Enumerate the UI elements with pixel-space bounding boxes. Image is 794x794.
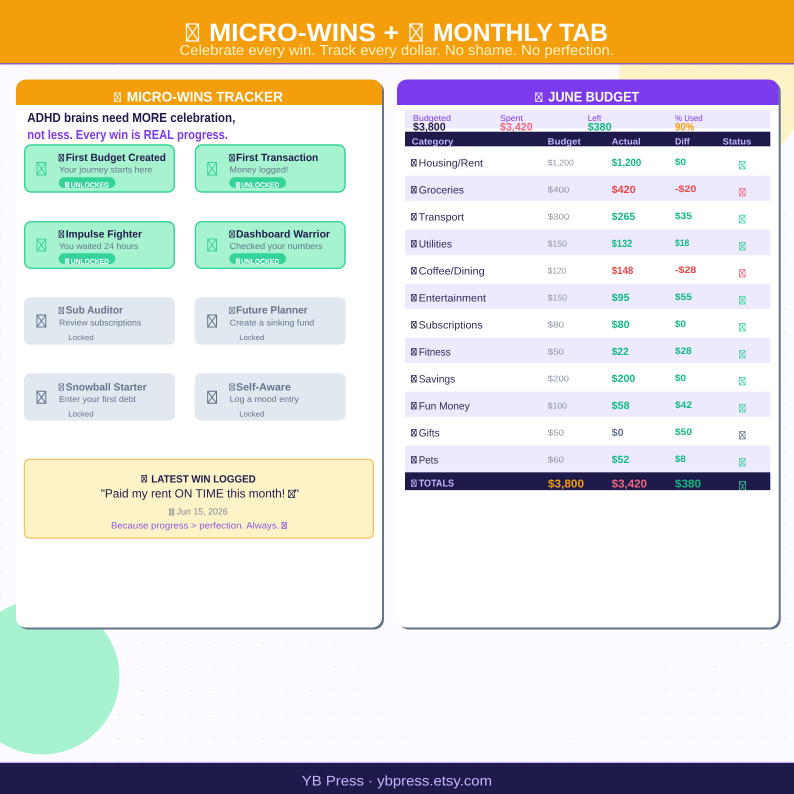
row: Fun Money: [405, 392, 770, 417]
intro text: ADHD brains need MORE celebration,: [27, 110, 235, 125]
title: [186, 19, 608, 47]
subtitle: Celebrate every win. Track every dollar. No shame. No perfection.: [180, 43, 614, 59]
icon: locked symbol: [37, 315, 46, 327]
badge: Self-Aware (locked): Locked: [239, 410, 264, 419]
row: Entertainment: Entertainment: [419, 292, 486, 304]
panel heading: micro-wins tracker: [16, 80, 382, 105]
row: Pets: Pets: [419, 454, 438, 466]
icon: status ok: [740, 162, 745, 169]
row: Subscriptions: $80: [612, 319, 630, 331]
row: Coffee/Dining: Coffee/Dining: [419, 265, 485, 277]
row: Savings: $0: [675, 373, 686, 384]
badge: Self-Aware (locked): [195, 373, 346, 421]
row: Groceries: $400: [548, 184, 570, 194]
row: Savings: Savings: [419, 373, 455, 385]
panel heading: micro-wins tracker: MICRO-WINS TRACKER: [127, 89, 283, 105]
intro text: [27, 110, 235, 142]
row: Entertainment: $95: [612, 292, 630, 304]
badge: Dashboard Warrior: [195, 222, 345, 268]
callout: latest win logged: ": [295, 486, 299, 500]
badge: Self-Aware (locked): Self-Aware: [236, 381, 291, 393]
panel: June budget: [397, 80, 781, 630]
stat: percent used: % Used: [675, 113, 703, 123]
row: totals: $380: [675, 478, 701, 490]
callout: latest win logged: Jun 15, 2026: [177, 507, 228, 517]
row: Housing/Rent: $1,200: [612, 157, 641, 169]
icon: status ok: [740, 350, 745, 358]
panel: micro-wins tracker: [16, 80, 384, 630]
badge: First Budget Created: Your journey starts here: [59, 165, 153, 175]
icon: status ok: [740, 458, 745, 466]
panel heading: June budget: JUNE BUDGET: [548, 89, 640, 105]
row: Subscriptions: Subscriptions: [419, 319, 483, 331]
icon: locked symbol: [208, 391, 216, 403]
icon: badge symbol: [37, 162, 46, 175]
badge: Impulse Fighter: Impulse Fighter: [66, 228, 142, 240]
table header: Category: [412, 136, 453, 146]
budget table: [405, 132, 770, 491]
row: Fun Money: $58: [612, 400, 630, 412]
row: Savings: $200: [612, 373, 635, 385]
badge: Impulse Fighter: UNLOCKED: [71, 257, 110, 266]
row: Utilities: [405, 230, 770, 255]
intro text: not less. Every win is REAL progress.: [27, 127, 228, 142]
stat: budgeted: Budgeted: [413, 113, 451, 123]
row: totals: TOTALS: [419, 479, 454, 490]
row: Utilities: $18: [675, 238, 689, 249]
stat: left: $380: [588, 122, 612, 134]
row: Pets: $52: [612, 454, 629, 466]
icon: status ok: [740, 378, 745, 385]
badge: First Budget Created: First Budget Created: [66, 152, 166, 164]
table header: Actual: [612, 136, 641, 146]
row: Coffee/Dining: [412, 265, 745, 277]
stat: budgeted: [413, 113, 451, 134]
row: Utilities: $150: [548, 238, 567, 248]
row: Transport: $35: [675, 211, 693, 222]
row: Transport: $300: [548, 211, 570, 221]
row: Groceries: -$20: [675, 184, 696, 195]
row: Coffee/Dining: $148: [612, 265, 633, 277]
badge: Future Planner (locked): [195, 297, 346, 345]
row: totals: [405, 472, 770, 492]
badge: Snowball Starter (locked): Enter your first debt: [59, 394, 137, 404]
stat: spent: $3,420: [500, 122, 533, 134]
row: Coffee/Dining: $120: [548, 265, 567, 275]
row: Fitness: [405, 338, 770, 363]
row: Savings: [412, 373, 745, 385]
row: Utilities: $132: [612, 238, 632, 250]
title: MICRO-WINS +: [209, 19, 399, 47]
row: Fitness: $28: [675, 346, 692, 357]
row: Transport: Transport: [419, 211, 464, 223]
row: Housing/Rent: Housing/Rent: [419, 157, 483, 169]
header banner: [0, 0, 794, 64]
icon: status ok: [740, 296, 745, 304]
stat: percent used: [675, 113, 703, 134]
badge: Dashboard Warrior: Checked your numbers: [230, 241, 323, 251]
stat: spent: [500, 113, 533, 134]
row: Entertainment: [405, 284, 770, 309]
row: Fun Money: Fun Money: [419, 400, 470, 412]
badge: Self-Aware (locked): Log a mood entry: [230, 394, 300, 404]
badge: Future Planner (locked): Future Planner: [236, 305, 308, 317]
table header: Status: [723, 136, 751, 146]
badge: First Transaction: UNLOCKED: [241, 181, 280, 190]
icon: status over: [740, 188, 745, 196]
row: Housing/Rent: $0: [675, 157, 686, 168]
row: Pets: $60: [548, 454, 564, 464]
badge: Dashboard Warrior: Dashboard Warrior: [236, 228, 330, 240]
icon: status total: [740, 482, 746, 492]
callout: latest win logged: Because progress > perfection. Always.: [111, 520, 279, 530]
row: Groceries: $420: [612, 184, 636, 196]
row: Pets: $8: [675, 454, 686, 465]
row: Subscriptions: $80: [548, 319, 564, 329]
icon: status ok: [740, 216, 745, 223]
badge: Future Planner (locked): Create a sinking fund: [230, 317, 315, 327]
row: Fitness: $50: [548, 346, 564, 356]
icon: badge symbol: [208, 239, 216, 251]
badge: Future Planner (locked): Locked: [239, 333, 264, 342]
row: Coffee/Dining: -$28: [675, 265, 696, 276]
badge: First Budget Created: UNLOCKED: [71, 181, 110, 190]
row: Entertainment: $150: [548, 292, 567, 302]
callout: latest win logged: [24, 459, 373, 538]
row: Fun Money: $100: [548, 400, 567, 410]
icon: locked symbol: [37, 391, 46, 403]
row: Fitness: $22: [612, 346, 629, 358]
row: Fun Money: $42: [675, 400, 692, 411]
badge: Sub Auditor (locked): [24, 297, 175, 345]
badge: Sub Auditor (locked): Sub Auditor: [66, 305, 123, 317]
icon: locked symbol: [208, 315, 216, 327]
row: Gifts: Gifts: [419, 427, 440, 439]
row: Transport: $265: [612, 211, 635, 223]
badge: First Budget Created: [25, 145, 174, 192]
row: Savings: $200: [548, 373, 569, 383]
footer: [0, 762, 794, 794]
row: totals: $3,800: [548, 478, 584, 490]
panel heading: June budget: [397, 80, 779, 105]
badge: Sub Auditor (locked): Review subscriptions: [59, 317, 141, 327]
icon: status ok: [740, 404, 745, 412]
row: Utilities: Utilities: [419, 238, 452, 250]
table header: Diff: [675, 136, 691, 146]
row: totals: $3,420: [612, 478, 647, 490]
table header: Budget: [548, 136, 581, 146]
row: Gifts: $50: [675, 427, 692, 438]
row: Groceries: Groceries: [419, 184, 464, 196]
footer: YB Press · ybpress.etsy.com: [302, 773, 492, 789]
icon: badge symbol: [208, 162, 216, 175]
badge: First Transaction: [195, 145, 345, 192]
badge: First Transaction: First Transaction: [236, 152, 318, 164]
callout: latest win logged: "Paid my rent ON TIME this month!: [101, 486, 285, 500]
stat: percent used: 90%: [675, 122, 694, 134]
row: Transport: [412, 211, 745, 223]
stat: budgeted: $3,800: [413, 122, 446, 134]
badge: First Transaction: Money logged!: [230, 165, 288, 175]
badge: Dashboard Warrior: UNLOCKED: [241, 257, 280, 266]
row: Entertainment: $55: [675, 292, 693, 303]
summary strip: [405, 110, 770, 134]
stat: left: [588, 113, 612, 134]
decorative yellow circle: [619, 0, 794, 173]
badge: Snowball Starter (locked): [24, 373, 175, 421]
row: Subscriptions: [412, 319, 745, 331]
row: Gifts: $50: [548, 427, 564, 437]
decorative green circle: [0, 600, 120, 754]
stat: spent: Spent: [500, 113, 524, 123]
stat: left: Left: [588, 113, 602, 123]
row: Gifts: [412, 427, 745, 439]
table header: [405, 132, 770, 146]
icon: status ok: [740, 324, 745, 331]
icon: badge symbol: [37, 239, 46, 251]
badge: Snowball Starter (locked): Locked: [68, 410, 94, 419]
row: Fitness: Fitness: [419, 346, 451, 358]
row: Groceries: [405, 176, 770, 201]
row: Pets: [405, 446, 770, 472]
row: Housing/Rent: [412, 157, 745, 169]
icon: status ok: [740, 242, 745, 250]
row: Housing/Rent: $1,200: [548, 157, 574, 167]
title: MONTHLY TAB: [433, 19, 608, 47]
callout: latest win logged: LATEST WIN LOGGED: [151, 473, 256, 485]
badge: Impulse Fighter: You waited 24 hours: [59, 241, 138, 251]
icon: status over: [740, 270, 745, 277]
badge: Snowball Starter (locked): Snowball Starter: [66, 381, 147, 393]
badge: Impulse Fighter: [25, 222, 174, 268]
badge: Sub Auditor (locked): Locked: [68, 333, 94, 342]
row: Gifts: $0: [612, 427, 624, 439]
icon: status neutral: [740, 432, 745, 439]
row: Subscriptions: $0: [675, 319, 686, 330]
